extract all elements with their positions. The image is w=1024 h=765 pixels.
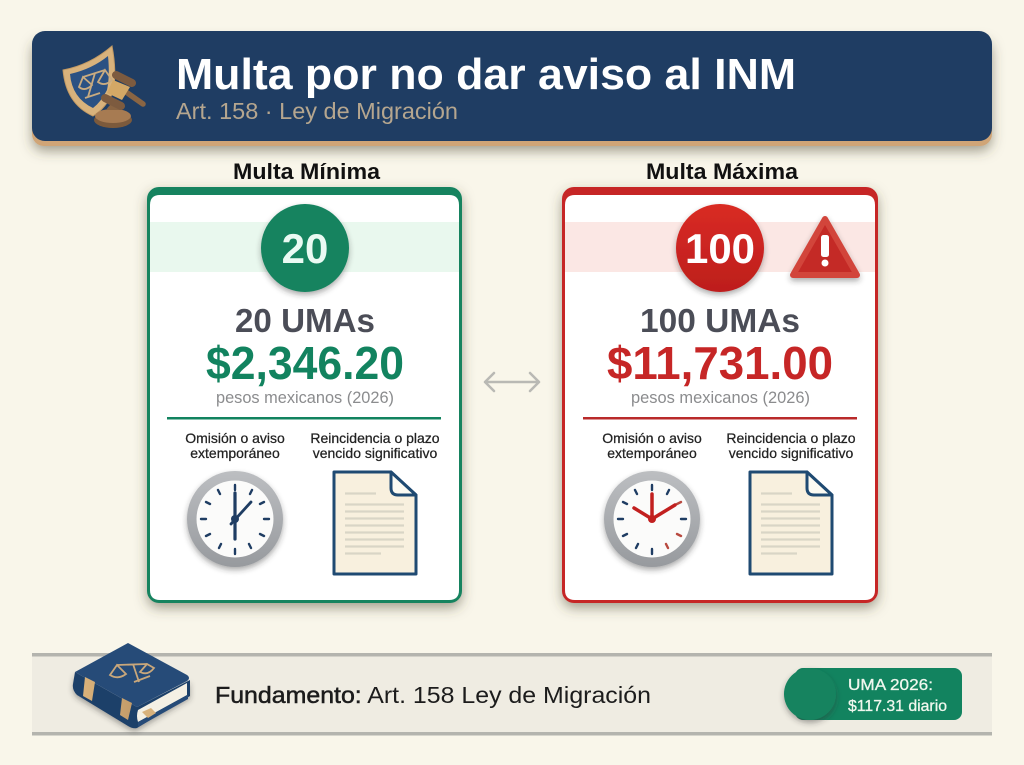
caption: reincidencia: vencido significativo bbox=[729, 445, 853, 461]
icon: warning triangle bbox=[793, 219, 857, 275]
highlight band bbox=[565, 222, 875, 272]
caption: omision: extemporáneo bbox=[190, 445, 280, 461]
icon: document bbox=[750, 472, 832, 574]
caption: omision: Omisión o aviso bbox=[185, 430, 285, 446]
icon: law book bbox=[73, 643, 190, 728]
icon: document bbox=[334, 472, 416, 574]
caption: reincidencia: Reincidencia o plazo bbox=[726, 430, 856, 446]
pill: uma value: UMA 2026: bbox=[848, 677, 933, 694]
umas label: 20 UMAs bbox=[235, 302, 375, 339]
panel: multa minima bbox=[147, 187, 462, 603]
badge: 20 bbox=[261, 204, 349, 292]
caption: reincidencia: vencido significativo bbox=[313, 445, 437, 461]
icon: clock bbox=[187, 471, 283, 567]
pill: uma value bbox=[784, 668, 962, 720]
subtitle: Art. 158 · Ley de Migración bbox=[176, 98, 458, 124]
badge: 100: 100 bbox=[685, 225, 755, 272]
highlight band bbox=[150, 222, 459, 272]
footer band bbox=[32, 643, 992, 736]
panel heading: multa minima: Multa Mínima bbox=[233, 159, 381, 184]
caption: reincidencia: Reincidencia o plazo bbox=[310, 430, 440, 446]
currency note: pesos mexicanos (2026) bbox=[216, 389, 394, 407]
arrow: between panels bbox=[485, 373, 539, 391]
caption: omision: extemporáneo bbox=[607, 445, 697, 461]
caption: omision: Omisión o aviso bbox=[602, 430, 702, 446]
badge: 20: 20 bbox=[282, 225, 328, 272]
header banner bbox=[32, 31, 992, 146]
umas label: 100 UMAs bbox=[640, 302, 800, 339]
currency note: pesos mexicanos (2026) bbox=[631, 389, 810, 407]
badge: 100 bbox=[676, 204, 764, 292]
amount: $11,731.00 bbox=[607, 337, 833, 389]
panel: multa maxima bbox=[562, 187, 878, 603]
amount: $2,346.20 bbox=[206, 337, 404, 389]
reference text: Fundamento: Art. 158 Ley de Migración bbox=[215, 682, 651, 708]
icon: shield with scales and gavel bbox=[63, 46, 143, 128]
panel heading: multa maxima: Multa Máxima bbox=[646, 159, 799, 184]
title: Multa por no dar aviso al INM bbox=[176, 50, 796, 99]
icon: clock bbox=[604, 471, 700, 567]
pill: uma value: $117.31 diario bbox=[848, 698, 947, 715]
